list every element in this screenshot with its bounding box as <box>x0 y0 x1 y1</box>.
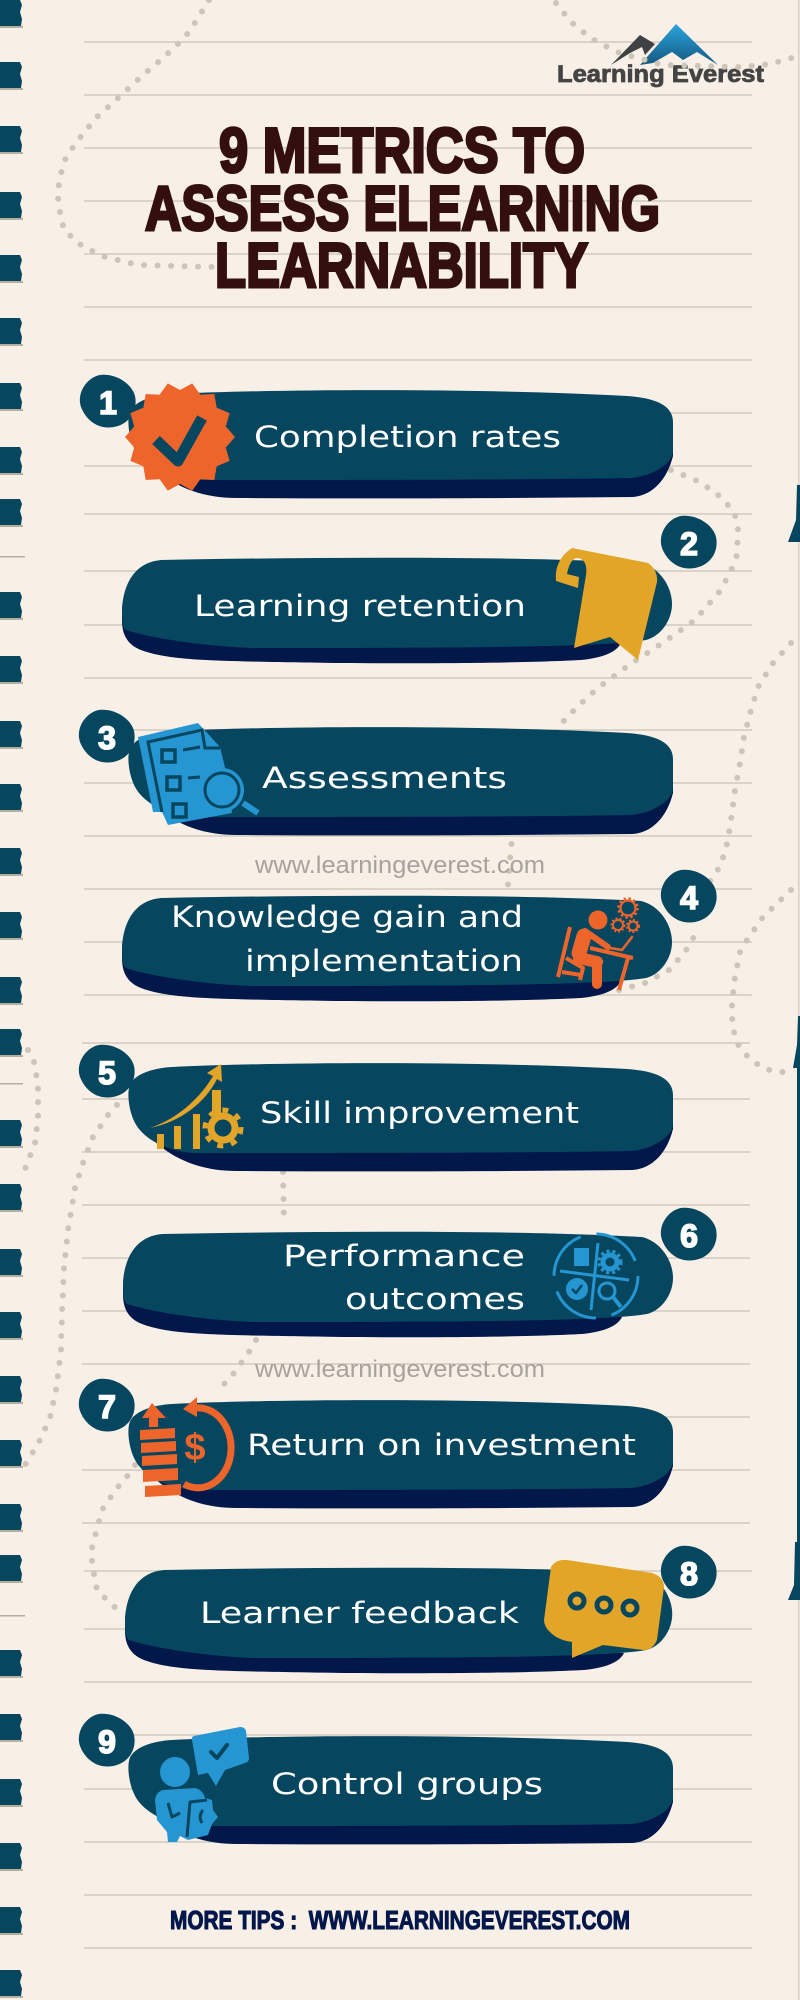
title: ASSESS ELEARNING <box>145 174 660 244</box>
number badge 6: 6 <box>680 1218 698 1254</box>
logo: Learning Everest <box>557 24 764 88</box>
label <box>283 1239 525 1316</box>
watermark 1: www.learningeverest.com <box>254 852 545 879</box>
icon: person with check speech bubble <box>155 1727 249 1842</box>
label: Control groups <box>271 1767 543 1801</box>
label: Learning retention <box>194 589 526 623</box>
spiral binding tabs <box>0 0 25 1998</box>
right edge page marks <box>788 485 800 1600</box>
number badge 1: 1 <box>99 385 117 421</box>
icon: gold speech bubble <box>544 1560 664 1658</box>
number badge 2: 2 <box>680 526 698 562</box>
icon: coin stack and dollar return arrow <box>140 1397 231 1497</box>
number badge 9: 9 <box>98 1724 116 1760</box>
icon: orange check badge <box>125 383 235 491</box>
panel: 4 knowledge gain and implementation <box>122 870 717 1001</box>
icon: checklist and magnifier <box>138 723 258 825</box>
number badge 6 <box>661 1208 717 1261</box>
number badge 1 <box>80 375 136 428</box>
number badge 9 <box>79 1714 135 1767</box>
label: Skill improvement <box>260 1096 579 1130</box>
number badge 4 <box>661 870 717 923</box>
number badge 4: 4 <box>680 880 698 916</box>
number badge 8 <box>661 1546 717 1599</box>
panel: 2 learning retention <box>122 516 717 663</box>
label: implementation <box>245 944 523 978</box>
number badge 5: 5 <box>98 1055 116 1091</box>
label: Knowledge gain and <box>171 900 523 934</box>
label: Return on investment <box>247 1428 636 1462</box>
label <box>171 900 523 978</box>
title <box>145 116 660 301</box>
panel: 1 completion rates <box>80 375 673 498</box>
panel: 5 skill improvement <box>79 1045 673 1171</box>
panel: 7 return on investment <box>79 1379 673 1508</box>
logo: Learning Everest: Learning Everest <box>557 61 764 88</box>
number badge 3: 3 <box>98 720 116 756</box>
label: Completion rates <box>254 420 561 454</box>
number badge 8: 8 <box>680 1556 698 1592</box>
label: Assessments <box>262 761 507 795</box>
icon: person at desk with gears <box>558 898 639 990</box>
icon: process cycle <box>554 1234 638 1318</box>
icon: growth chart and gear <box>150 1064 241 1149</box>
panel: 8 learner feedback <box>125 1546 717 1673</box>
number badge 2 <box>661 516 717 569</box>
dotted decorative paths <box>25 0 796 1609</box>
panel: 3 assessments <box>79 710 673 835</box>
label: Performance <box>283 1239 525 1273</box>
panel: 9 control groups <box>79 1714 673 1844</box>
number badge 3 <box>79 710 135 763</box>
watermark 2: www.learningeverest.com <box>254 1356 545 1383</box>
label: Learner feedback <box>200 1596 519 1630</box>
icon: gold bookmark scroll <box>556 548 657 660</box>
number badge 7 <box>79 1379 135 1432</box>
title: 9 METRICS TO <box>219 116 585 186</box>
number badge 7: 7 <box>98 1389 116 1425</box>
number badge 5 <box>79 1045 135 1098</box>
footer: more tips: MORE TIPS : WWW.LEARNINGEVEREST.COM <box>170 1907 630 1935</box>
label: outcomes <box>345 1282 525 1316</box>
icon: coin stack and dollar return arrow: $ <box>184 1427 206 1469</box>
title: LEARNABILITY <box>215 231 588 301</box>
panel: 6 performance outcomes <box>123 1208 717 1337</box>
